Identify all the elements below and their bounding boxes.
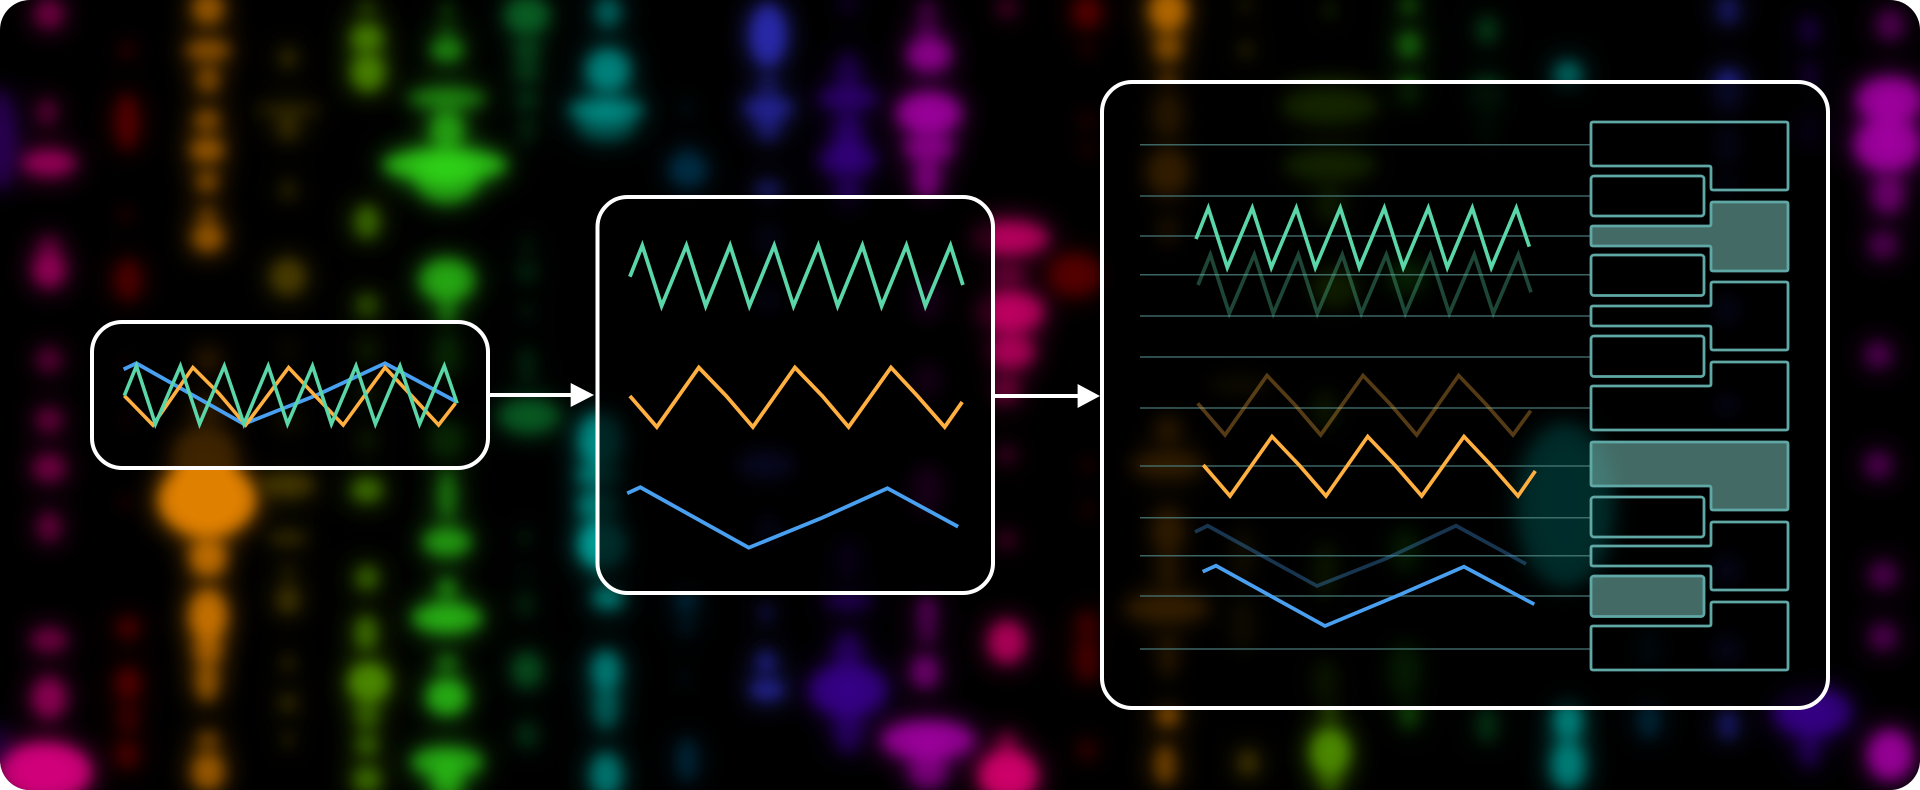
combined green wave [124, 366, 457, 424]
block grid [1591, 122, 1788, 670]
separated blue wave [627, 487, 958, 548]
separated orange wave [630, 368, 962, 427]
combined blue wave [124, 363, 456, 424]
panel: aligned waves and blocks [1102, 82, 1828, 708]
separated green wave [630, 246, 963, 306]
arrow: separated to features [993, 384, 1100, 408]
bright green wave [1196, 208, 1529, 268]
bright blue wave [1203, 566, 1534, 626]
combined orange wave [124, 368, 455, 425]
arrow: combined to separated [488, 383, 594, 407]
dim green wave [1198, 255, 1531, 314]
dim orange wave [1198, 376, 1531, 435]
bright orange wave [1203, 436, 1535, 496]
panel: combined signal [92, 322, 488, 468]
panel: separated waves [598, 197, 993, 593]
dim blue wave [1195, 526, 1526, 586]
